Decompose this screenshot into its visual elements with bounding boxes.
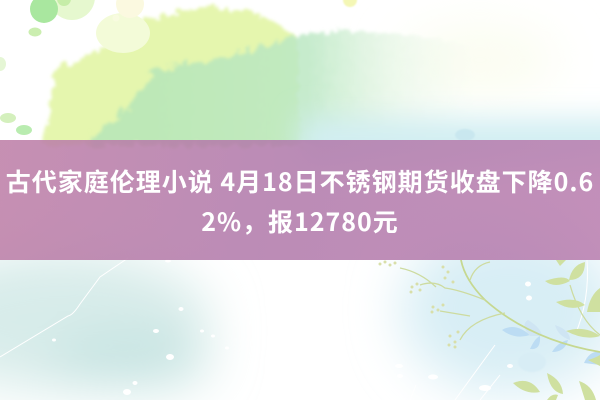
green leaves xyxy=(513,260,600,400)
title banner xyxy=(0,140,600,260)
decorative circles xyxy=(0,0,475,141)
blue leaves xyxy=(502,320,600,372)
watercolor wash: pale blue along the banner's upper edge xyxy=(300,118,600,168)
white sparkles, lower right xyxy=(395,260,588,400)
watercolor splash: yellow-green xyxy=(42,6,300,145)
title line 1: 古代家庭伦理小说 4月18日不锈钢期货收盘下降0.6 xyxy=(6,163,594,199)
title line 2: 2%，报12780元 xyxy=(201,203,399,239)
green stems with seed sprigs xyxy=(400,260,600,352)
seed clusters xyxy=(378,260,460,348)
watercolor splash: mint green xyxy=(85,30,490,145)
white thread and sparkles, lower left xyxy=(0,258,229,395)
title text xyxy=(6,163,594,239)
